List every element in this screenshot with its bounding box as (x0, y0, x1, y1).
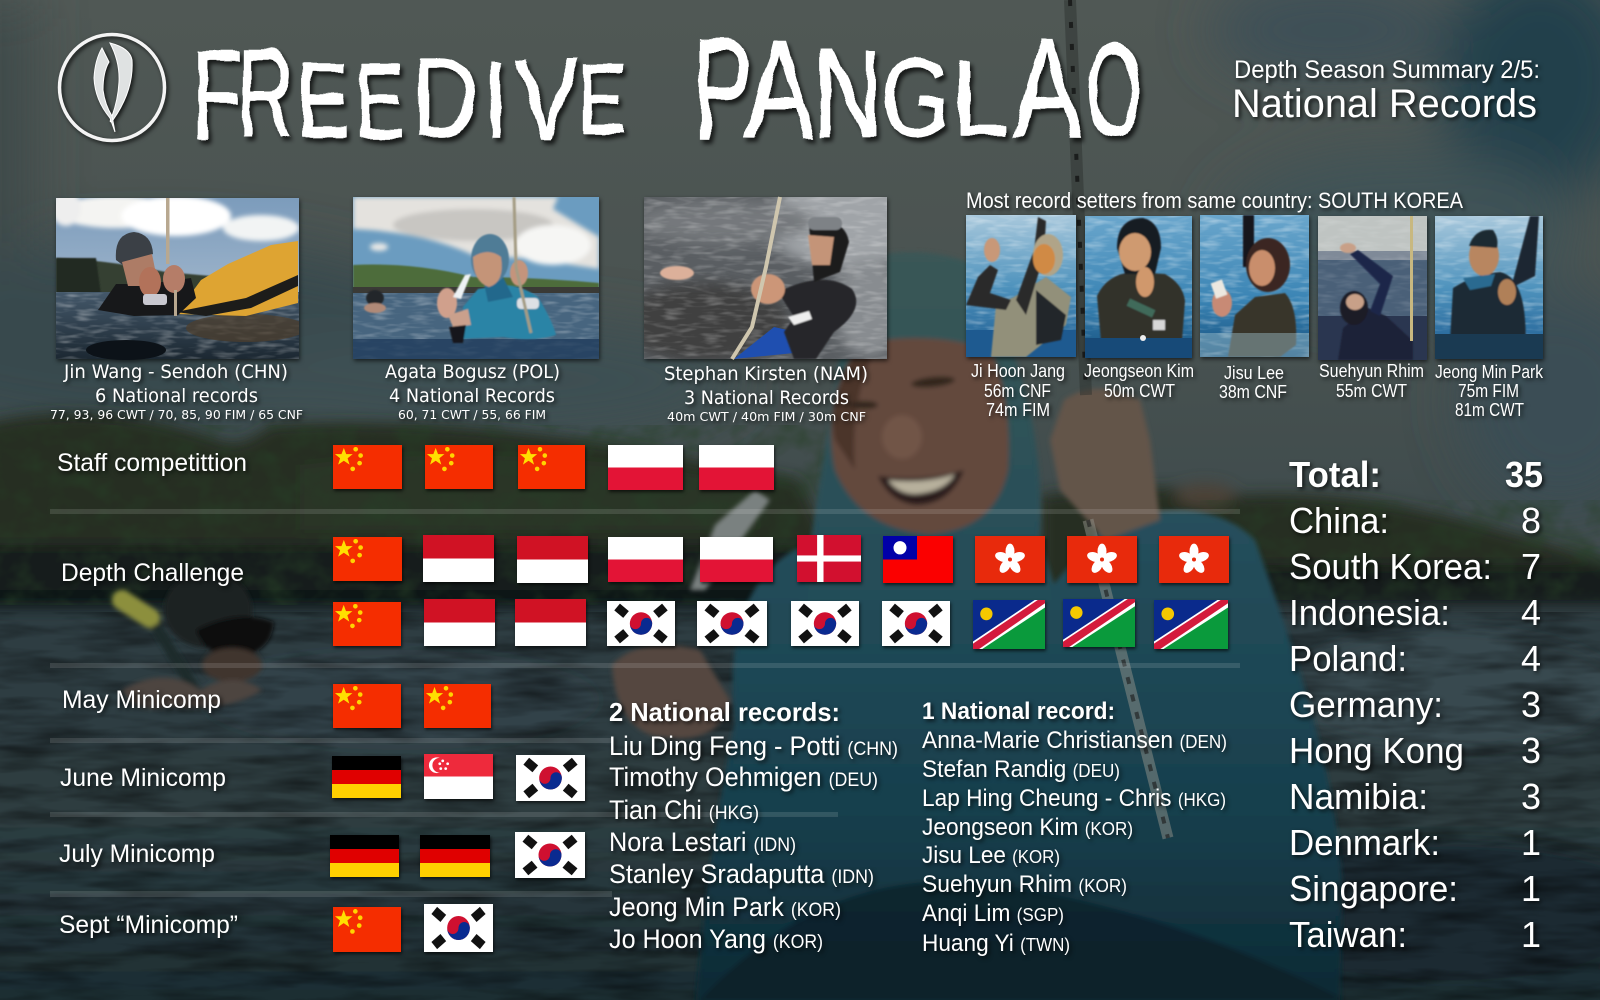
list: 2 national records: Jo Hoon Yang (KOR) (609, 924, 823, 954)
list: 2 national records: Timothy Oehmigen (DEU) (609, 762, 878, 792)
list: 1 national record: Anqi Lim (SGP) (922, 900, 1064, 927)
title: FREEDIVE PANGLAO: G (882, 35, 950, 160)
title: FREEDIVE PANGLAO: R (238, 24, 294, 163)
totals table by country: 1 (1521, 868, 1541, 909)
subtitle: Depth Season Summary (1232, 56, 1540, 126)
photo: Ji Hoon Jang (964, 215, 1079, 362)
totals table by country: 3 (1521, 684, 1541, 725)
captions for South Korean record setters: Jeongseon Kim (1084, 361, 1194, 381)
totals table by country: 8 (1521, 500, 1541, 541)
captions for South Korean record setters: Jeong Min Park (1435, 362, 1544, 382)
title: FREEDIVE PANGLAO: E (578, 44, 626, 156)
captions for featured record holders: 3 National Records (684, 387, 849, 409)
title: FREEDIVE PANGLAO: D (412, 35, 478, 160)
distant diver (122, 572, 274, 708)
competition labels: Depth Challenge (61, 559, 244, 587)
list: 2 national records: Liu Ding Feng - Potti (CHN) (609, 731, 898, 761)
captions for featured record holders: Agata Bogusz (POL) (385, 361, 560, 383)
captions for featured record holders: Jin Wang - Sendoh (CHN) (63, 361, 288, 383)
totals table by country: Germany: (1289, 684, 1443, 725)
heading: most record setters: Most record setters from same country: SOUTH KOREA (966, 188, 1463, 213)
list: 2 national records: Jeong Min Park (KOR) (609, 892, 841, 922)
subtitle: Depth Season Summary: Depth Season Summary 2/5: (1234, 56, 1540, 84)
title: FREEDIVE PANGLAO (192, 8, 1142, 169)
list: 1 national record: Jisu Lee (KOR) (922, 842, 1060, 869)
photo: Stephan Kirsten (643, 196, 890, 364)
totals table by country: 7 (1521, 546, 1541, 587)
captions for South Korean record setters: Ji Hoon Jang (971, 361, 1065, 381)
title: FREEDIVE PANGLAO: I (484, 40, 508, 161)
list: 1 national record: Huang Yi (TWN) (922, 930, 1070, 957)
title: FREEDIVE PANGLAO: A (746, 13, 814, 167)
captions for featured record holders (50, 361, 868, 424)
competition labels: Staff competittion (57, 449, 247, 477)
captions for South Korean record setters (971, 361, 1544, 420)
flags: Staff competition (333, 445, 774, 490)
captions for featured record holders: 77, 93, 96 CWT / 70, 85, 90 FIM / 65 CNF (50, 407, 303, 422)
flags: Depth Challenge (333, 535, 1229, 649)
totals table by country: Total: (1289, 454, 1381, 495)
logo: leaf in a ring (60, 34, 164, 140)
title: FREEDIVE PANGLAO: N (814, 25, 882, 163)
competition labels (57, 449, 247, 939)
totals table by country: 1 (1521, 914, 1541, 955)
photo: Suehyun Rhim (1317, 216, 1430, 364)
photo: Jisu Lee (1199, 215, 1312, 361)
title: FREEDIVE PANGLAO: P (693, 8, 753, 169)
title: FREEDIVE PANGLAO: O (1086, 17, 1142, 164)
totals table by country: 3 (1521, 730, 1541, 771)
captions for South Korean record setters: 55m CWT (1336, 381, 1407, 401)
list: 1 national record (922, 698, 1227, 957)
captions for featured record holders: 40m CWT / 40m FIM / 30m CNF (667, 409, 866, 424)
totals table by country: 4 (1521, 592, 1541, 633)
photo: Jin Wang (55, 198, 302, 364)
list: 1 national record: 1 National record: (922, 698, 1115, 725)
totals table by country: China: (1289, 500, 1389, 541)
totals table by country: Singapore: (1289, 868, 1458, 909)
captions for featured record holders: Stephan Kirsten (NAM) (664, 363, 868, 385)
flags: Sept Minicomp (333, 904, 493, 952)
totals table by country: Namibia: (1289, 776, 1428, 817)
totals table by country: Poland: (1289, 638, 1407, 679)
captions for South Korean record setters: Suehyun Rhim (1319, 361, 1424, 381)
title: FREEDIVE PANGLAO: E (296, 42, 350, 159)
list: 1 national record: Lap Hing Cheung - Chris (HKG) (922, 785, 1226, 812)
title: FREEDIVE PANGLAO: L (952, 40, 1008, 158)
title: FREEDIVE PANGLAO: V (516, 35, 578, 163)
captions for South Korean record setters: 81m CWT (1455, 400, 1524, 420)
title: FREEDIVE PANGLAO: E (356, 43, 404, 160)
subtitle: Depth Season Summary: National Records (1232, 82, 1537, 126)
totals table by country: Indonesia: (1289, 592, 1450, 633)
list: 2 national records: Nora Lestari (IDN) (609, 827, 796, 857)
totals table by country: 1 (1521, 822, 1541, 863)
totals table by country: 4 (1521, 638, 1541, 679)
totals table by country: 3 (1521, 776, 1541, 817)
captions for South Korean record setters: 38m CNF (1219, 382, 1287, 402)
competition labels: July Minicomp (59, 840, 215, 868)
list: 2 national records: 2 National records: (609, 697, 840, 727)
competition labels: June Minicomp (60, 764, 226, 792)
list: 1 national record: Suehyun Rhim (KOR) (922, 871, 1127, 898)
photo: Jeongseon Kim (1084, 216, 1195, 362)
totals table by country: Denmark: (1289, 822, 1440, 863)
captions for South Korean record setters: 50m CWT (1104, 381, 1175, 401)
captions for South Korean record setters: 56m CNF (984, 381, 1051, 401)
list: 1 national record: Stefan Randig (DEU) (922, 756, 1120, 783)
flags: July Minicomp (330, 832, 585, 878)
captions for featured record holders: 60, 71 CWT / 55, 66 FIM (398, 407, 546, 422)
title: FREEDIVE PANGLAO: F (192, 26, 242, 165)
list: 2 national records: Stanley Sradaputta (IDN) (609, 859, 874, 889)
totals table by country: Taiwan: (1289, 914, 1407, 955)
competition labels: Sept “Minicomp” (59, 911, 238, 939)
section dividers (50, 509, 1240, 897)
totals table by country (1289, 454, 1543, 955)
totals table by country: Hong Kong (1289, 730, 1464, 771)
captions for featured record holders: 6 National records (95, 385, 258, 407)
list: 2 national records: Tian Chi (HKG) (609, 795, 759, 825)
photo: Agata Bogusz (352, 197, 602, 363)
list: 2 national records (609, 697, 898, 954)
flags: June Minicomp (332, 754, 585, 801)
totals table by country: 35 (1505, 454, 1543, 495)
captions for South Korean record setters: Jisu Lee (1224, 363, 1284, 383)
captions for featured record holders: 4 National Records (389, 385, 555, 407)
competition labels: May Minicomp (62, 686, 221, 714)
totals table by country: South Korea: (1289, 546, 1492, 587)
photo: Jeong Min Park (1434, 216, 1546, 363)
title: FREEDIVE PANGLAO: A (1013, 9, 1081, 166)
captions for South Korean record setters: 75m FIM (1458, 381, 1519, 401)
list: 1 national record: Jeongseon Kim (KOR) (922, 814, 1133, 841)
main diver body (695, 511, 1342, 1000)
list: 1 national record: Anna-Marie Christiansen (DEN) (922, 727, 1227, 754)
flags: May Minicomp (333, 684, 491, 728)
captions for South Korean record setters: 74m FIM (986, 400, 1050, 420)
